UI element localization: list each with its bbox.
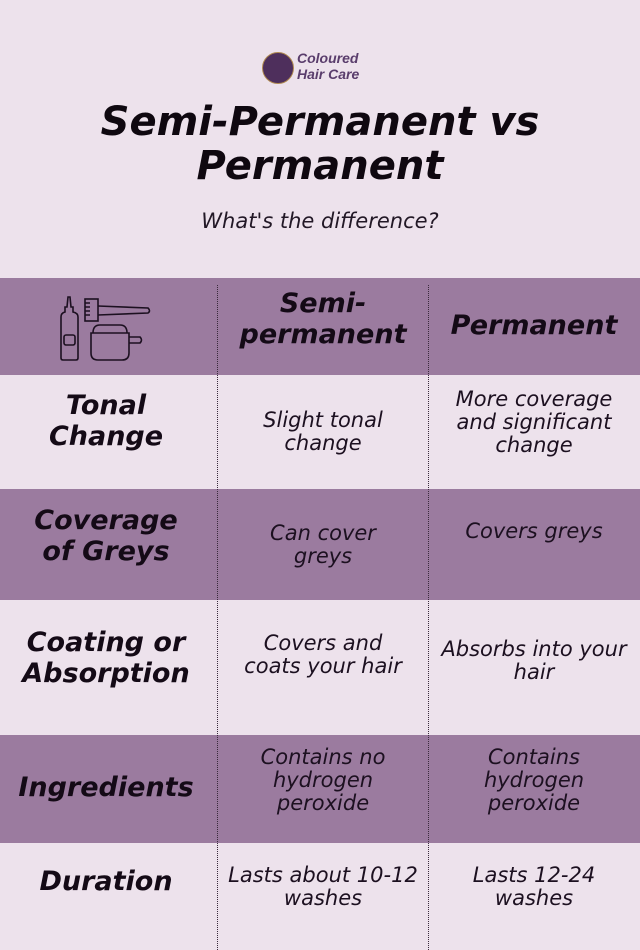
subtitle: What's the difference?: [201, 209, 439, 233]
logo text: Coloured: [297, 50, 358, 66]
row label: ingredients: Ingredients: [18, 772, 194, 803]
icon: logo circle: [262, 52, 294, 84]
cell: change: [284, 431, 362, 455]
band: coverage row: [0, 489, 640, 600]
header: semi-permanent: permanent: [240, 319, 406, 350]
cell: change: [495, 433, 573, 457]
cell: hydrogen: [484, 768, 584, 792]
title: Semi-Permanent vs: [101, 99, 539, 145]
cell: Can cover: [270, 520, 376, 544]
cell: More coverage: [456, 387, 612, 411]
cell: hair: [514, 660, 554, 684]
header: semi-permanent: Semi-: [280, 288, 366, 319]
cell: [270, 520, 377, 568]
cell: [440, 637, 628, 684]
row label: coverage: Coverage: [34, 505, 178, 536]
row label: coating: Absorption: [22, 658, 190, 689]
cell: Covers greys: [465, 519, 603, 543]
row label: coverage: [34, 505, 178, 567]
cell: Lasts about 10-12: [228, 863, 418, 887]
icon: hair dye tools: [60, 296, 150, 361]
cell: [263, 408, 383, 455]
cell: [484, 744, 584, 814]
cell: [244, 631, 403, 678]
cell: Slight tonal: [263, 408, 383, 432]
logo text: Hair Care: [297, 66, 359, 82]
logo: [262, 50, 359, 84]
cell: Absorbs into your: [441, 637, 627, 661]
header: semi-permanent: [239, 288, 408, 350]
band: ingredients row: [0, 735, 640, 843]
row label: duration: Duration: [39, 866, 173, 897]
cell: Covers and: [264, 631, 382, 655]
cell: hydrogen: [273, 768, 373, 792]
cell: [473, 863, 595, 910]
cell: Contains: [488, 744, 580, 768]
cell: Lasts 12-24: [473, 863, 595, 887]
cell: coats your hair: [244, 654, 402, 678]
cell: peroxide: [488, 790, 580, 814]
cell: peroxide: [277, 790, 369, 814]
row label: coating: [20, 627, 190, 689]
cell: [261, 744, 385, 814]
title: [101, 99, 539, 189]
band: header row: [0, 278, 640, 375]
logo text: [297, 50, 359, 82]
row label: coverage: of Greys: [42, 536, 170, 567]
row label: tonal change: Change: [49, 421, 163, 452]
header: permanent: Permanent: [451, 310, 617, 341]
cell: and significant: [456, 410, 611, 434]
title: Permanent: [196, 143, 443, 189]
cell: [228, 863, 418, 910]
cell: Contains no: [261, 744, 385, 768]
cell: washes: [495, 886, 573, 910]
cell: washes: [284, 886, 362, 910]
row label: tonal change: [49, 390, 163, 452]
cell: [456, 387, 612, 457]
row label: coating: Coating or: [27, 627, 185, 658]
row label: tonal change: Tonal: [66, 390, 146, 421]
cell: greys: [294, 544, 352, 568]
